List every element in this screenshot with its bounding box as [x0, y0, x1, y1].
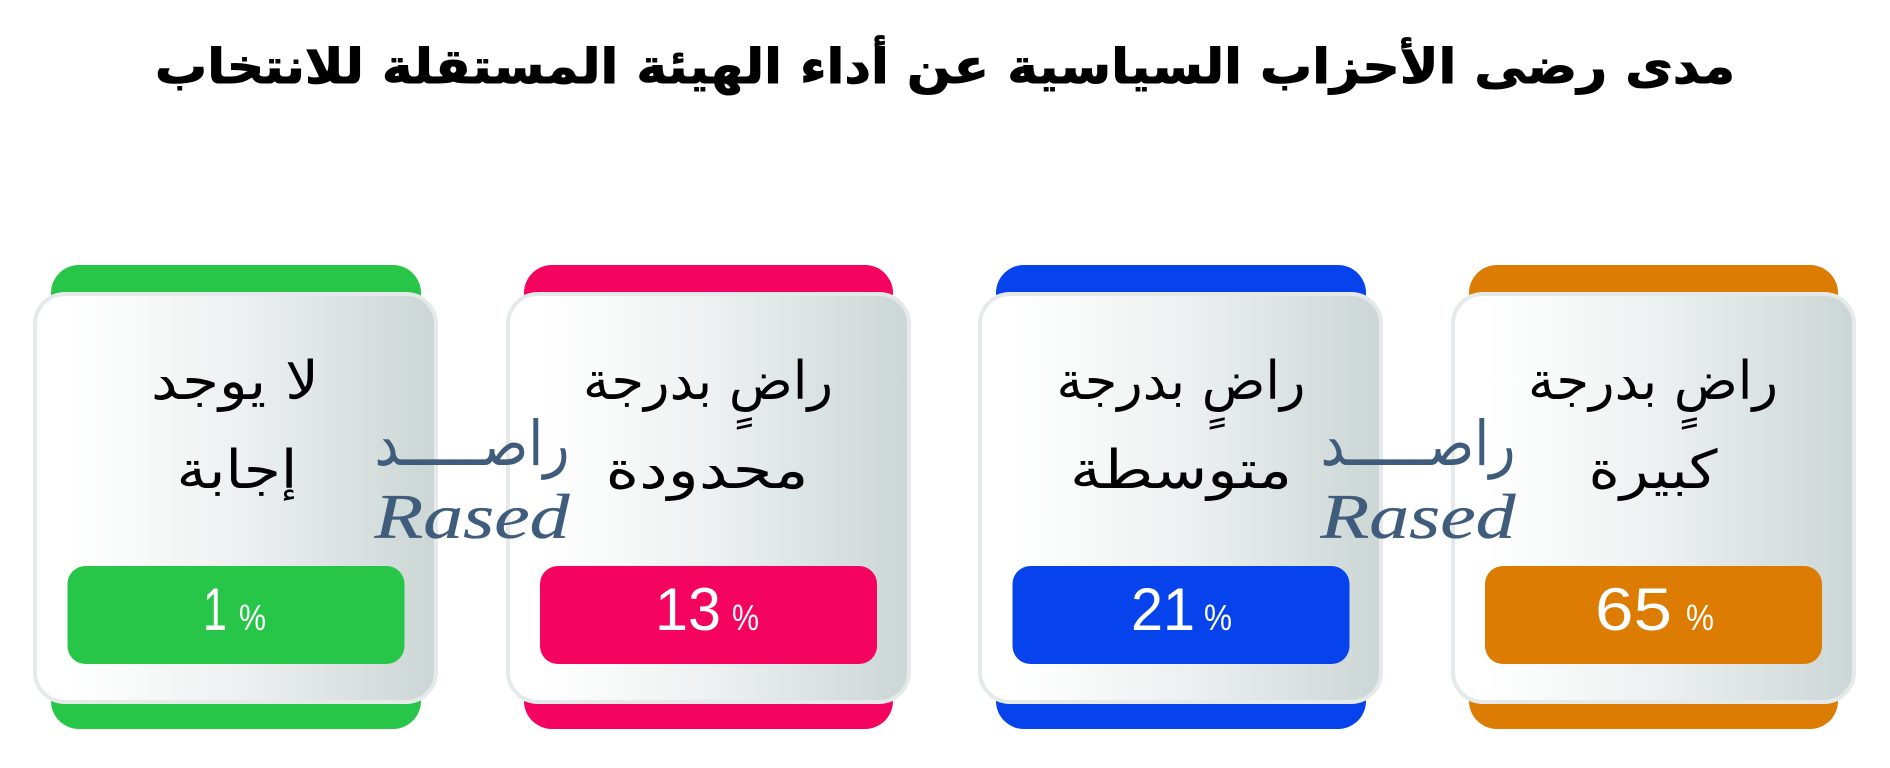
- card body: [508, 294, 909, 702]
- label: محدودة: [606, 440, 808, 501]
- label: راضٍ بدرجة: [1528, 351, 1778, 430]
- label: [583, 351, 833, 501]
- watermark: Rased right: [1319, 407, 1517, 552]
- value bar: %: [1686, 597, 1714, 638]
- card body: [1453, 294, 1854, 702]
- green tab: [51, 265, 421, 729]
- panel: large 65%: [1453, 265, 1854, 729]
- panel: medium 21%: [980, 265, 1381, 729]
- card body: [35, 294, 436, 702]
- value bar: 1: [203, 576, 227, 643]
- title: مدى رضى الأحزاب السياسية عن أداء الهيئة المستقلة للانتخاب: [155, 35, 1735, 95]
- value bar: 13: [655, 576, 721, 643]
- panel: limited 13%: [508, 265, 909, 729]
- value bar: [68, 566, 404, 664]
- value bar: 21: [1131, 576, 1195, 643]
- watermark: Rased left: Rased: [373, 481, 571, 552]
- orange tab: [1469, 265, 1838, 729]
- pink tab: [524, 265, 893, 729]
- watermark: Rased left: [373, 407, 571, 552]
- label: [151, 351, 319, 501]
- label: [1056, 351, 1306, 501]
- blue tab: [996, 265, 1366, 729]
- label: راضٍ بدرجة: [583, 351, 833, 430]
- label: لا يوجد: [151, 351, 319, 412]
- watermark: Rased right: Rased: [1319, 481, 1517, 552]
- value bar: [1012, 566, 1350, 664]
- watermark: Rased right: راصـــــد: [1320, 407, 1516, 480]
- value bar: [1485, 566, 1822, 664]
- card body: [980, 294, 1381, 702]
- label: متوسطة: [1070, 440, 1292, 501]
- label: راضٍ بدرجة: [1056, 351, 1306, 430]
- label: كبيرة: [1588, 440, 1718, 501]
- value bar: %: [732, 597, 759, 638]
- value bar: 65: [1595, 576, 1672, 643]
- value bar: %: [239, 597, 266, 638]
- label: [1528, 351, 1778, 501]
- label: إجابة: [176, 440, 298, 501]
- value bar: [540, 566, 877, 664]
- value bar: %: [1204, 597, 1232, 638]
- panel: no answer 1%: [35, 265, 436, 729]
- watermark: Rased left: راصـــــد: [374, 407, 570, 480]
